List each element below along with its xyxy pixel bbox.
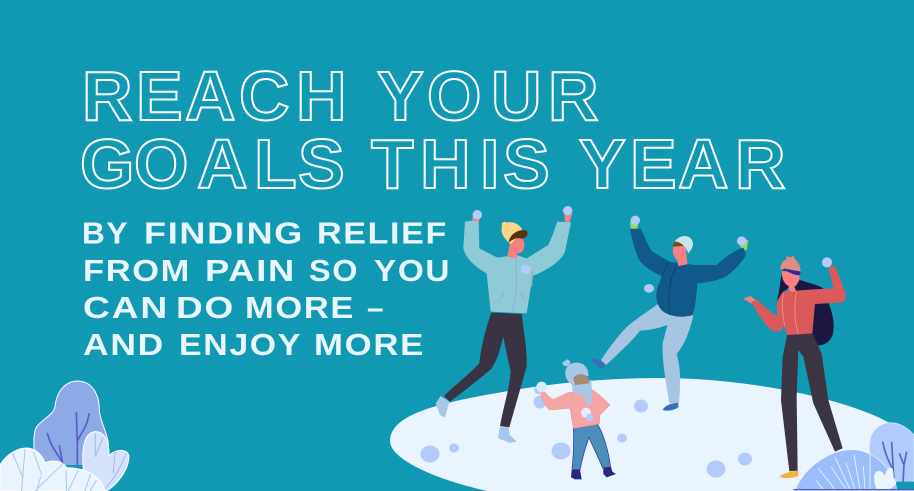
front pale bush [0,448,105,491]
subtitle [82,216,451,362]
subtitle: YOU [374,253,451,288]
seams [782,292,798,334]
hand [743,296,757,304]
face [573,374,589,385]
hat [675,236,693,253]
subtitle: MORE [314,327,425,362]
white leaf [874,468,897,490]
figure: woman in red jumper [743,255,846,478]
title: REACH YOUR [82,57,599,135]
trousers [572,424,611,470]
left foot [436,396,449,418]
title [80,57,786,203]
long hair [777,268,834,345]
right bushes [793,423,914,491]
pompom [562,359,570,366]
left bushes [0,381,129,491]
hair [509,230,528,243]
jacket [541,389,610,428]
trousers [781,333,843,471]
snow hill [390,378,914,491]
subtitle: AND [83,327,165,362]
subtitle: SO [309,253,359,288]
right foot [498,427,517,443]
hands [472,210,572,223]
jumper [630,228,746,317]
snowballs [631,216,640,225]
right pale bush [83,432,129,491]
snowballs on ground [420,396,752,478]
hat [565,363,588,385]
shoes [591,359,678,411]
hair [673,240,683,247]
subtitle: BY [82,216,129,250]
hat [780,255,801,271]
subtitle: ENJOY [179,327,302,362]
subtitle: MORE [245,290,355,325]
trousers [444,313,527,427]
hood and scarf [572,380,592,405]
trousers [601,304,693,403]
neck and face [673,244,687,266]
snowball [822,257,832,267]
subtitle: FROM [83,253,191,288]
hat [501,222,523,244]
subtitle: PAIN [205,253,296,288]
figure: man in navy jumper [591,216,748,411]
jacket seams [493,258,533,313]
figure: child [534,359,616,479]
ground line [793,489,914,490]
subtitle: DO [176,290,235,325]
neck and face [507,236,524,258]
boot [779,471,798,478]
subtitle: FINDING [144,216,304,250]
jacket [463,221,571,313]
title: GOALS THIS YEAR [80,125,786,203]
gloves [630,222,748,251]
subtitle: CAN [83,290,169,325]
back tree [869,423,914,491]
headband [783,268,801,275]
snowballs [473,210,482,219]
figure: man in light jacket [436,206,572,443]
back tree [34,381,108,470]
seams [662,262,677,315]
boots [571,467,616,479]
front bush [795,450,897,490]
jumper [752,266,846,335]
neck and face [782,271,800,292]
snowballs in hands [534,386,543,394]
subtitle: RELIEF [317,216,448,250]
subtitle: – [367,290,385,325]
